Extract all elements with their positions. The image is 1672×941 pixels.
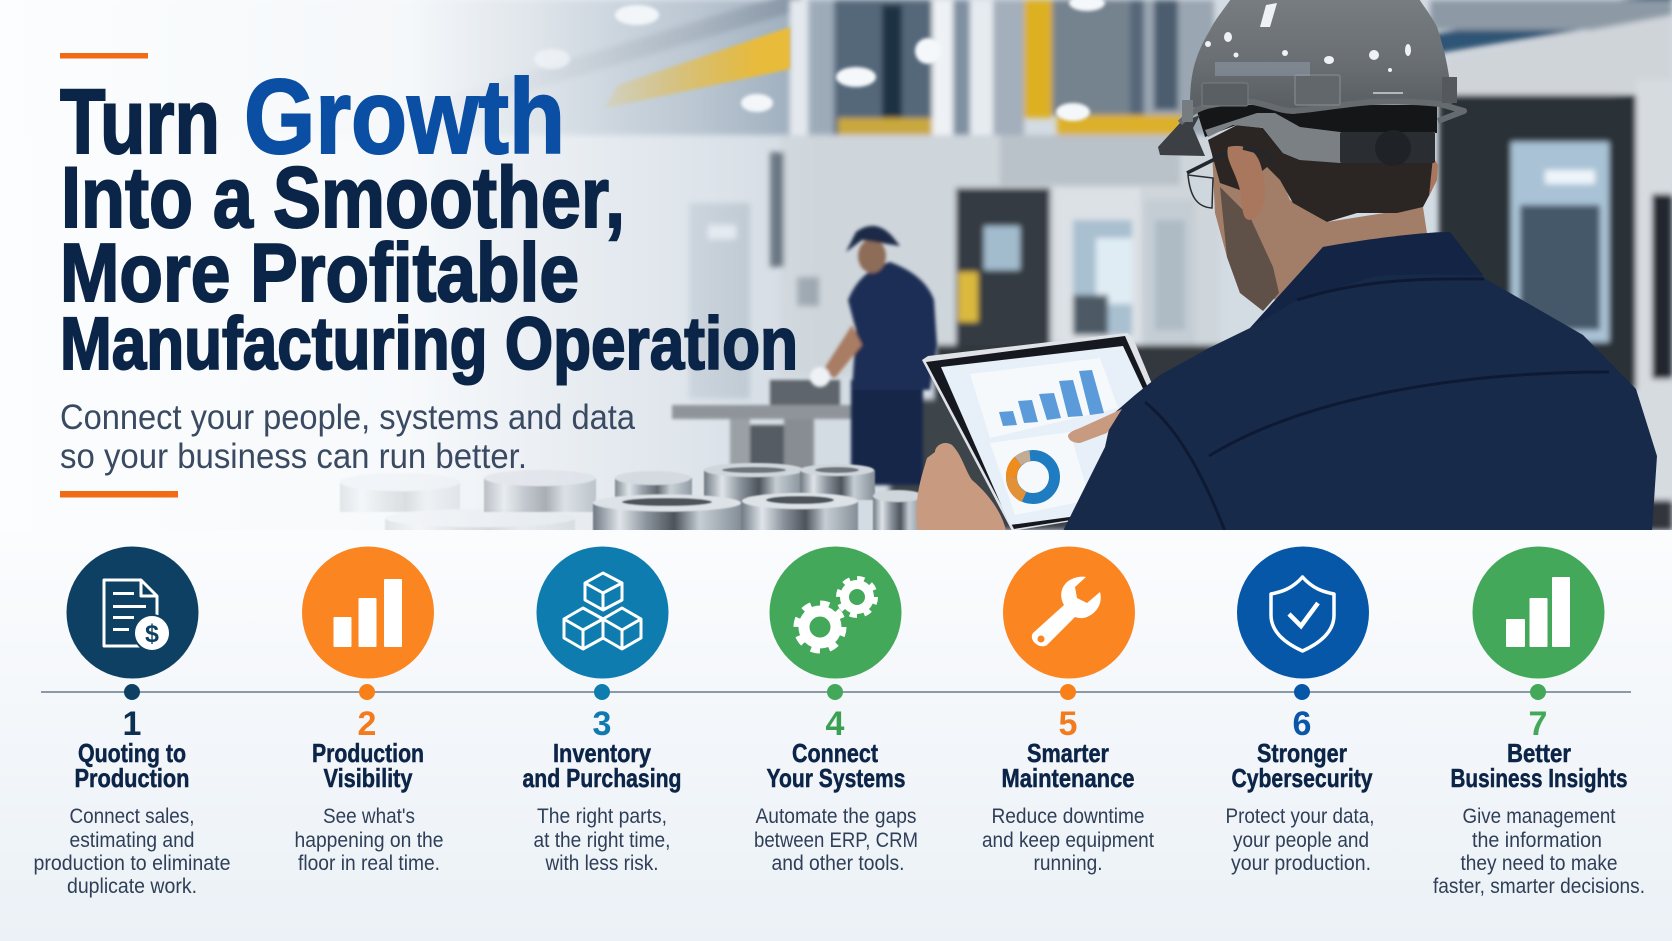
heading 7 <box>1450 738 1628 793</box>
highlighted word: Growth <box>244 58 565 176</box>
number 3: 3 <box>593 705 611 743</box>
left white fade over photo <box>0 0 820 530</box>
left hand <box>916 443 1006 531</box>
description 2 <box>294 805 444 875</box>
description 3: at the right time, <box>534 829 670 852</box>
ratchet strap and knob <box>1340 130 1435 166</box>
description 5: running. <box>1034 852 1102 875</box>
description 3: with less risk. <box>545 852 658 875</box>
tablet bar chart <box>999 370 1104 426</box>
description 6: Protect your data, <box>1226 805 1374 828</box>
hero photo: factory with worker and tablet <box>278 0 1672 530</box>
worker face <box>858 239 886 273</box>
description 2: See what's <box>323 805 415 828</box>
glasses <box>1187 148 1272 208</box>
description 4: between ERP, CRM <box>754 829 918 852</box>
heading 2: Visibility <box>324 763 413 793</box>
yellow overhead beam <box>605 27 790 108</box>
description 5 <box>982 805 1154 875</box>
pointing finger <box>1068 409 1122 443</box>
heading 3: and Purchasing <box>522 763 682 793</box>
heading 6: Cybersecurity <box>1232 763 1373 793</box>
step 1 <box>34 546 230 898</box>
description 7: they need to make <box>1460 852 1618 875</box>
jacket seams <box>1145 279 1609 531</box>
heading 7: Better <box>1507 738 1571 768</box>
right ear sliver <box>1429 157 1438 196</box>
timeline dot 7 <box>1530 684 1546 700</box>
timeline dot 1 <box>124 684 140 700</box>
description 6: your people and <box>1233 829 1369 852</box>
heading 3 <box>522 738 682 793</box>
jacket collar <box>1250 232 1483 328</box>
icon: gears <box>770 546 902 678</box>
number 6: 6 <box>1293 705 1311 743</box>
timeline dot 5 <box>1060 684 1076 700</box>
bottom accent bar <box>60 491 178 498</box>
icon: shield with check <box>1237 546 1369 678</box>
worker cap <box>846 226 900 252</box>
description 1: estimating and <box>70 829 194 852</box>
heading 1: Quoting to <box>78 738 186 768</box>
icon: wrench <box>1003 546 1135 678</box>
title line 4: Manufacturing Operation <box>60 302 798 385</box>
heading 1: Production <box>74 763 190 793</box>
description 6 <box>1226 805 1374 875</box>
step 6 <box>1226 546 1374 875</box>
heading 6: Stronger <box>1257 738 1347 768</box>
heading 5: Maintenance <box>1002 763 1134 793</box>
heading 5 <box>1002 738 1134 793</box>
timeline line <box>41 691 1631 693</box>
donut card <box>990 432 1090 515</box>
hair <box>1208 125 1433 222</box>
face and neck <box>1212 150 1428 300</box>
tablet <box>922 333 1152 530</box>
step 5 <box>982 546 1154 875</box>
title line 1 <box>60 58 565 176</box>
tablet donut chart <box>1011 456 1054 498</box>
description 3 <box>534 805 670 875</box>
description 1: production to eliminate <box>34 852 230 875</box>
helmet brim rim <box>1180 102 1464 123</box>
description 1: duplicate work. <box>67 875 197 898</box>
worker arm <box>822 325 862 378</box>
icon: bar chart <box>302 546 434 678</box>
description 5: Reduce downtime <box>992 805 1144 828</box>
background worker <box>810 226 937 485</box>
ear <box>1227 146 1265 220</box>
description 7: the information <box>1472 829 1602 852</box>
heading 2 <box>312 738 424 793</box>
top accent bar <box>60 53 148 58</box>
step 4 <box>754 546 918 875</box>
description 1 <box>34 805 230 898</box>
number 7: 7 <box>1529 705 1547 743</box>
description 7 <box>1433 805 1645 898</box>
tablet screen <box>941 346 1143 525</box>
step 7 <box>1433 546 1645 898</box>
timeline dot 4 <box>827 684 843 700</box>
subtitle: so your business can run better. <box>60 437 527 476</box>
heading 6 <box>1232 738 1373 793</box>
description 2: happening on the <box>294 829 444 852</box>
description 1: Connect sales, <box>70 805 194 828</box>
panel: seven steps <box>0 530 1672 941</box>
worker glove <box>810 367 830 387</box>
timeline dot 6 <box>1294 684 1310 700</box>
description 4: Automate the gaps <box>756 805 916 828</box>
subtitle <box>60 398 635 476</box>
worker shirt <box>848 262 937 390</box>
timeline dot 3 <box>594 684 610 700</box>
step 2 <box>294 546 444 875</box>
description 5: and keep equipment <box>982 829 1154 852</box>
icon: bar chart <box>1472 546 1604 678</box>
timeline dot 2 <box>359 684 375 700</box>
factory background <box>431 0 1672 530</box>
number 2: 2 <box>358 705 376 743</box>
icon: quote document with dollar: $ <box>145 620 159 648</box>
number 4: 4 <box>826 705 845 743</box>
description 7: faster, smarter decisions. <box>1433 875 1645 898</box>
worker trousers <box>851 380 923 485</box>
heading 5: Smarter <box>1027 738 1109 768</box>
step 3 <box>522 546 682 875</box>
title line 2: Into a Smoother, <box>61 150 625 246</box>
heading 4: Your Systems <box>766 763 906 793</box>
heading 7: Business Insights <box>1450 763 1628 793</box>
tablet frame <box>922 333 1152 530</box>
lead worker <box>916 0 1657 531</box>
helmet slots and highlights <box>1182 3 1457 122</box>
heading 1 <box>74 738 190 793</box>
icon: quote document with dollar <box>66 546 198 678</box>
number 1: 1 <box>123 705 141 743</box>
helmet brim left underside <box>1158 115 1205 156</box>
beard <box>1220 187 1279 311</box>
helmet dome <box>1190 0 1452 112</box>
helmet suspension band <box>1205 113 1435 163</box>
chart card <box>970 358 1118 438</box>
description 2: floor in real time. <box>298 852 440 875</box>
title line 1: Turn <box>60 71 220 173</box>
heading 4: Connect <box>792 738 878 768</box>
title <box>60 58 798 385</box>
heading 4 <box>766 738 906 793</box>
heading 2: Production <box>312 738 424 768</box>
description 7: Give management <box>1462 805 1616 828</box>
description 6: your production. <box>1231 852 1371 875</box>
description 4 <box>754 805 918 875</box>
heading 3: Inventory <box>553 738 651 768</box>
helmet under-shadow <box>1195 105 1437 137</box>
work table <box>670 378 853 469</box>
icon: stacked cubes <box>536 546 668 678</box>
metal parts on the table <box>340 463 923 534</box>
title line 3: More Profitable <box>60 226 579 319</box>
jacket <box>1063 232 1657 531</box>
description 3: The right parts, <box>537 805 667 828</box>
number 5: 5 <box>1059 705 1077 743</box>
subtitle: Connect your people, systems and data <box>60 398 635 437</box>
description 4: and other tools. <box>772 852 904 875</box>
